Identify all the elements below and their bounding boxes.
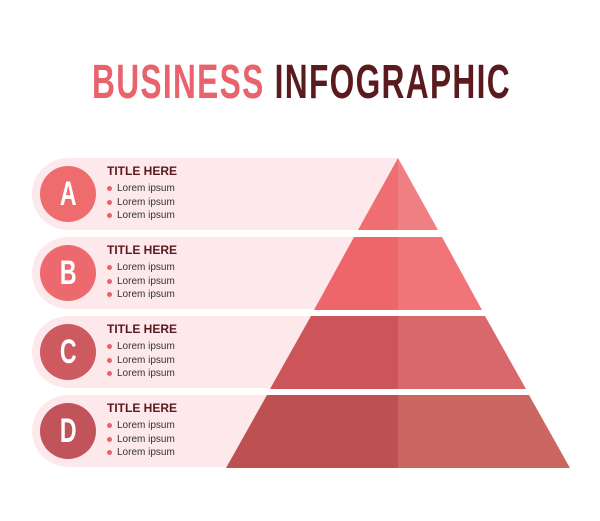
panel: row B: Lorem ipsum <box>117 276 175 286</box>
tier B <box>314 237 482 310</box>
panel: row C: Lorem ipsum <box>117 341 175 352</box>
title: BUSINESS INFOGRAPHIC <box>92 56 511 109</box>
panel: row B: Lorem ipsum <box>117 289 175 300</box>
panel: row A: Lorem ipsum <box>117 183 175 194</box>
panel: row A: A <box>60 175 76 213</box>
panel: row A: Lorem ipsum <box>117 196 175 208</box>
panel: row C: Lorem ipsum <box>117 368 175 379</box>
panel: row D: Lorem ipsum <box>117 434 175 444</box>
tier A <box>358 158 438 230</box>
panel: row C: C <box>60 333 76 371</box>
panel: row D: Lorem ipsum <box>117 420 175 431</box>
panel: row C <box>32 316 398 388</box>
panel: row B: Lorem ipsum <box>117 262 175 273</box>
panel: row D: TITLE HERE <box>107 401 177 415</box>
panel: row A: TITLE HERE <box>107 164 177 178</box>
panel: row B: TITLE HERE <box>107 243 177 257</box>
panel: row D: D <box>60 412 76 450</box>
tier C <box>270 316 526 389</box>
panel: row D <box>32 395 398 467</box>
panel: row B <box>32 237 398 309</box>
panel: row B: B <box>60 254 76 292</box>
tier D <box>226 395 570 468</box>
panel: row C: TITLE HERE <box>107 322 177 336</box>
panel: row A <box>32 158 398 230</box>
panel: row D: Lorem ipsum <box>117 447 175 458</box>
panel: row C: Lorem ipsum <box>117 354 175 366</box>
panel: row A: Lorem ipsum <box>117 210 175 221</box>
